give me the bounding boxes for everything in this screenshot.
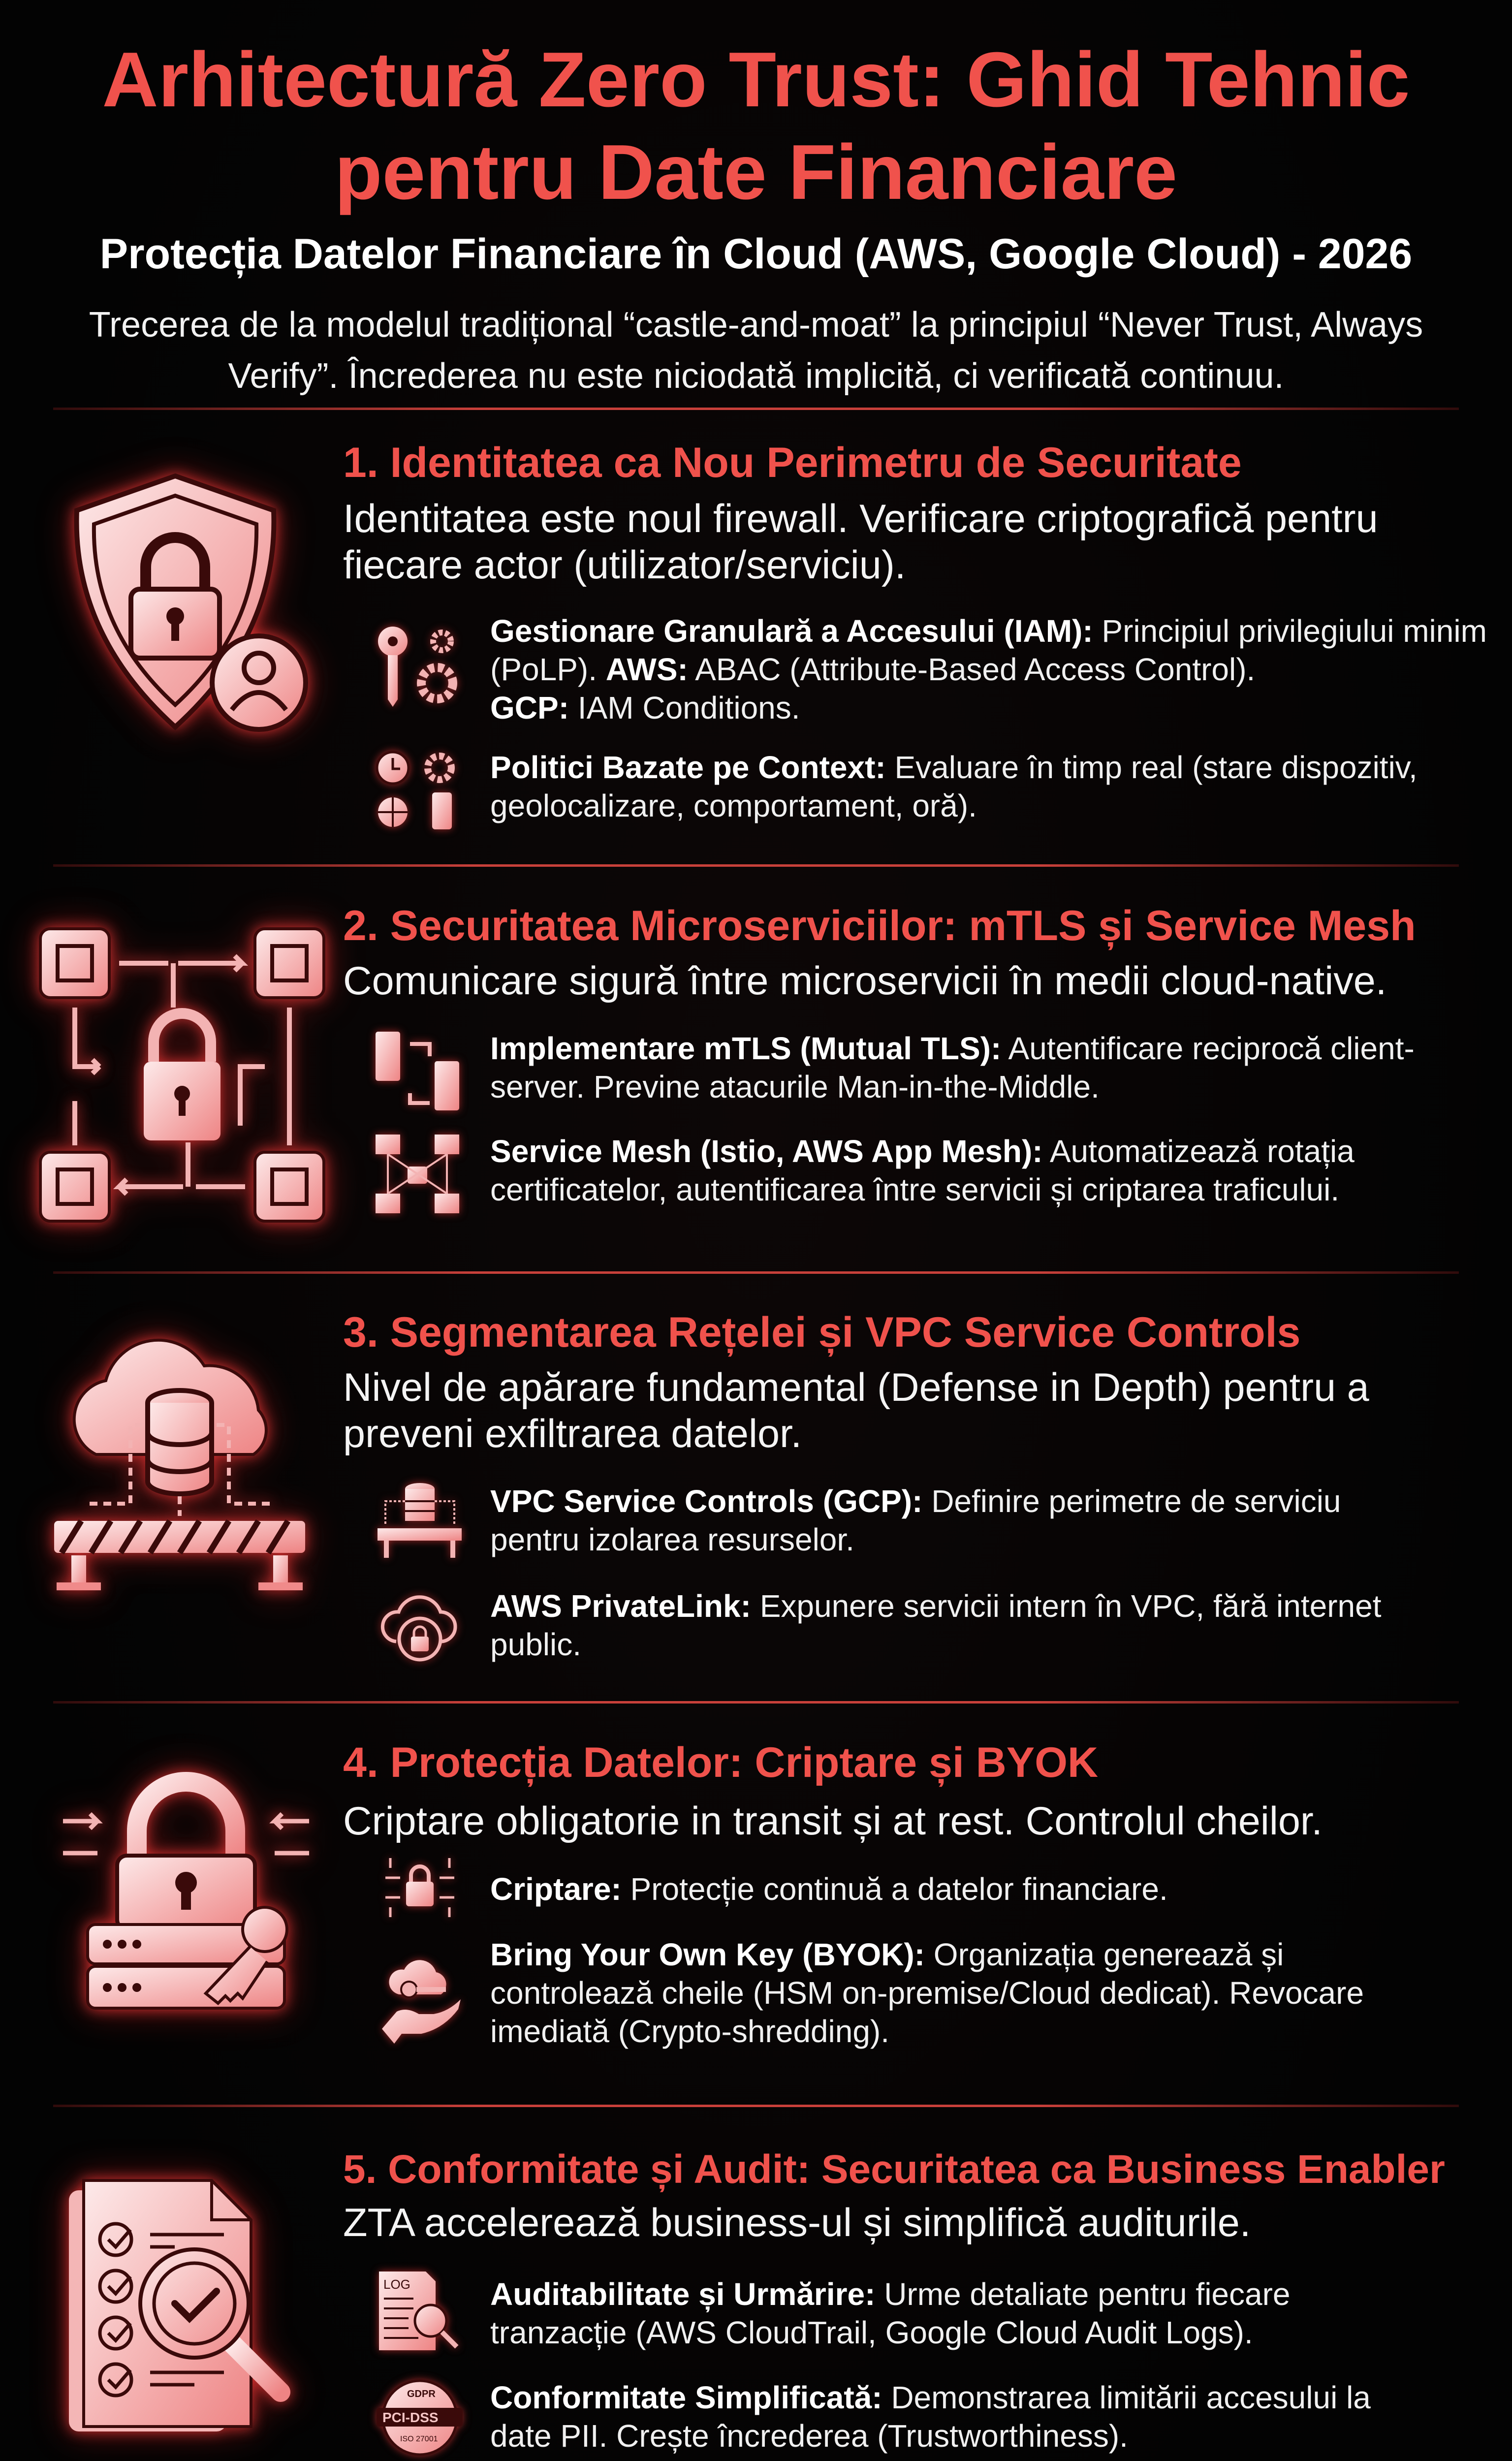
text: pentru izolarea resurselor. [490,1522,854,1557]
icon: GDPR PCI-DSS badge: ISO 27001 [400,2435,438,2443]
icon: clock gear globe phone [370,745,460,835]
text: tranzacție (AWS CloudTrail, Google Cloud Audit Logs). [490,2315,1253,2350]
text: certificatelor, autentificarea între servicii și criptarea traficului. [490,1172,1339,1207]
heading: 1. Identitatea ca Nou Perimetru de Securitate [343,439,1242,486]
text [490,613,1487,726]
text [490,750,1418,823]
bullet: compliance [373,2377,1505,2461]
heading: 2. Securitatea Microserviciilor: mTLS și Service Mesh [343,902,1416,949]
text [490,1935,1364,2051]
panel: section 2 microservices [17,902,1416,1245]
text: AWS PrivateLink: Expunere servicii intern în VPC, fără internet [490,1588,1381,1624]
heading: 5. Conformitate și Audit: Securitatea ca Business Enabler [343,2147,1445,2192]
text: Auditabilitate și Urmărire: Urme detaliate pentru fiecare [490,2276,1291,2312]
icon: GDPR PCI-DSS badge: PCI-DSS [382,2410,439,2425]
description: Criptare obligatorie in transit și at rest. Controlul cheilor. [343,1799,1323,1843]
text [490,1132,1354,1209]
icon: lock over servers with key [53,1777,321,2013]
description: fiecare actor (utilizator/serviciu). [343,543,906,587]
text [490,1587,1381,1664]
icon: two servers arrows [373,1029,462,1113]
icon: key and gears [373,621,463,710]
text [490,1029,1415,1106]
text: Service Mesh (Istio, AWS App Mesh): Automatizează rotația [490,1134,1354,1169]
icon: small barrier database [377,1479,463,1560]
title [102,36,1410,216]
icon: checklist document with magnifier [69,2171,300,2436]
title: pentru Date Financiare [335,129,1177,216]
panel: section 1 identity [52,439,1487,835]
bullet: AWS PrivateLink [373,1587,1505,1666]
bullet: encryption [373,1853,1505,1925]
text: Gestionare Granulară a Accesului (IAM): Principiul privilegiului minim [490,613,1487,649]
icon: GDPR PCI-DSS badge [377,2377,463,2459]
bullet: service mesh [373,1132,1505,1211]
text: server. Previne atacurile Man-in-the-Middle. [490,1069,1100,1104]
text: controlează cheile (HSM on-premise/Cloud dedicat). Revocare [490,1975,1364,2011]
description: preveni exfiltrarea datelor. [343,1412,802,1456]
icon: mesh [373,1132,462,1216]
heading: 3. Segmentarea Rețelei și VPC Service Controls [343,1309,1300,1356]
bullet: BYOK [373,1935,1505,2053]
description [343,497,1378,587]
bullet: context policies [370,745,1418,835]
text: VPC Service Controls (GCP): Definire perimetre de serviciu [490,1483,1341,1519]
text: Politici Bazate pe Context: Evaluare în timp real (stare dispozitiv, [490,750,1418,785]
panel: section 3 network segmentation [49,1304,1506,1678]
icon: LOG document [377,2269,463,2353]
icon: shield with lock and user [52,455,329,752]
description [343,1364,1369,1457]
bullet: auditability [373,2269,1505,2358]
text: imediată (Crypto-shredding). [490,2014,889,2049]
description: Identitatea este noul firewall. Verificare criptografică pentru [343,497,1378,541]
text: (PoLP). AWS: ABAC (Attribute-Based Access Control). [490,652,1255,687]
icon: small lock arrows [380,1853,459,1922]
bullet: mTLS [373,1029,1505,1106]
text: Implementare mTLS (Mutual TLS): Autentificare reciprocă client- [490,1031,1415,1066]
text: date PII. Crește încrederea (Trustworthiness). [490,2418,1128,2454]
icon: chip network with lock [17,905,347,1245]
icon: cloud database barrier [52,1339,308,1592]
text: Criptare: Protecție continuă a datelor financiare. [490,1871,1168,1907]
text [490,1482,1341,1559]
title: Arhitectură Zero Trust: Ghid Tehnic [102,36,1410,123]
icon: hand cloud key [377,1950,463,2044]
icon: GDPR PCI-DSS badge: GDPR [407,2389,436,2399]
panel: section 5 compliance [49,2136,1506,2461]
text: geolocalizare, comportament, oră). [490,788,977,823]
bullet: VPC service controls [373,1479,1505,1563]
text: GCP: IAM Conditions. [490,690,800,726]
heading: 4. Protecția Datelor: Criptare și BYOK [343,1739,1098,1786]
description: Comunicare sigură între microservicii în medii cloud-native. [343,959,1386,1003]
text [490,2275,1291,2352]
intro text [89,305,1423,396]
intro text: Trecerea de la modelul tradițional “castle-and-moat” la principiul “Never Trust, Always [89,305,1423,345]
subtitle: Protecția Datelor Financiare în Cloud (AWS, Google Cloud) - 2026 [100,230,1412,278]
bullet: IAM [373,613,1487,726]
intro text: Verify”. Încrederea nu este niciodată implicită, ci verificată continuu. [228,356,1284,396]
text: Conformitate Simplificată: Demonstrarea limitării accesului la [490,2380,1371,2415]
text [490,2378,1371,2455]
text: public. [490,1627,581,1662]
description: Nivel de apărare fundamental (Defense in Depth) pentru a [343,1365,1369,1410]
icon: LOG document: LOG [383,2277,410,2292]
text: Bring Your Own Key (BYOK): Organizația generează și [490,1937,1284,1972]
icon: cloud lock [377,1590,463,1664]
panel: section 4 data protection [49,1733,1506,2077]
description: ZTA accelerează business-ul și simplifică auditurile. [343,2201,1251,2245]
